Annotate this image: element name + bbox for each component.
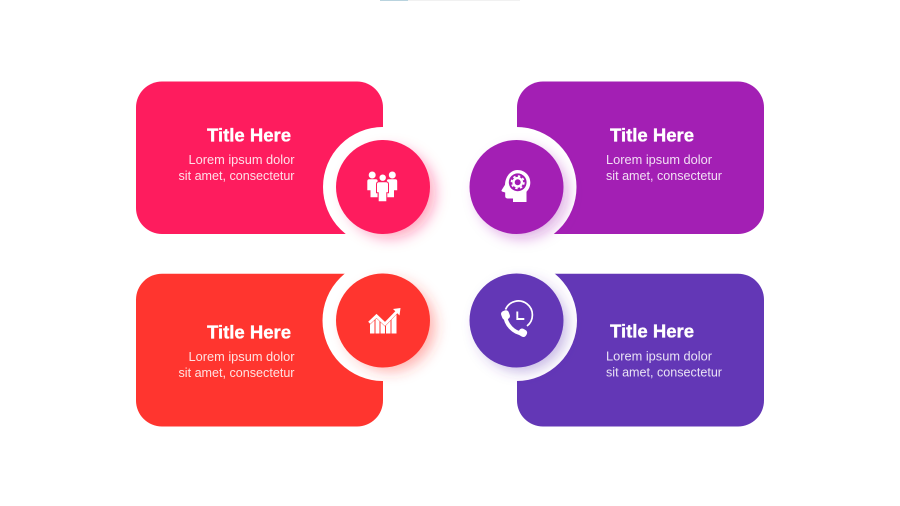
circle badge bbox=[336, 274, 430, 368]
text block bbox=[178, 350, 294, 380]
heading: Title Here bbox=[610, 126, 694, 146]
heading: Title Here bbox=[207, 322, 291, 342]
white ring bbox=[323, 127, 443, 247]
panel: top right (purple) bbox=[456, 82, 764, 247]
panel: top left (pink) bbox=[136, 82, 443, 247]
heading: Title Here bbox=[207, 126, 291, 146]
icon: growth chart bbox=[368, 308, 400, 334]
circle shadow bbox=[345, 148, 435, 238]
white ring bbox=[322, 260, 444, 381]
heading: Title Here bbox=[610, 322, 694, 342]
circle shadow bbox=[477, 148, 567, 238]
panel: bottom left (red) bbox=[136, 260, 444, 426]
text block bbox=[606, 350, 722, 380]
card background bbox=[517, 82, 764, 234]
text block: Lorem ipsum dolor bbox=[188, 350, 294, 364]
text block bbox=[606, 153, 722, 183]
text block: sit amet, consectetur bbox=[606, 366, 722, 380]
icon: phone and clock bbox=[500, 301, 532, 338]
white ring bbox=[456, 260, 577, 381]
circle shadow bbox=[345, 281, 435, 371]
circle badge bbox=[470, 274, 564, 368]
white ring bbox=[456, 127, 576, 247]
text block: Lorem ipsum dolor bbox=[606, 153, 712, 167]
card background bbox=[136, 274, 383, 426]
text block: Lorem ipsum dolor bbox=[606, 350, 712, 364]
card background bbox=[136, 82, 383, 234]
circle badge bbox=[336, 140, 430, 234]
icon: head with gear bbox=[502, 170, 530, 202]
text block: sit amet, consectetur bbox=[178, 366, 294, 380]
text block: Lorem ipsum dolor bbox=[188, 153, 294, 167]
text block: sit amet, consectetur bbox=[178, 169, 294, 183]
icon: team of people bbox=[367, 172, 397, 202]
text block bbox=[178, 153, 294, 183]
panel: bottom right (violet) bbox=[456, 260, 764, 426]
text block: sit amet, consectetur bbox=[606, 169, 722, 183]
circle shadow bbox=[477, 281, 567, 371]
card background bbox=[517, 274, 764, 426]
circle badge bbox=[470, 140, 564, 234]
